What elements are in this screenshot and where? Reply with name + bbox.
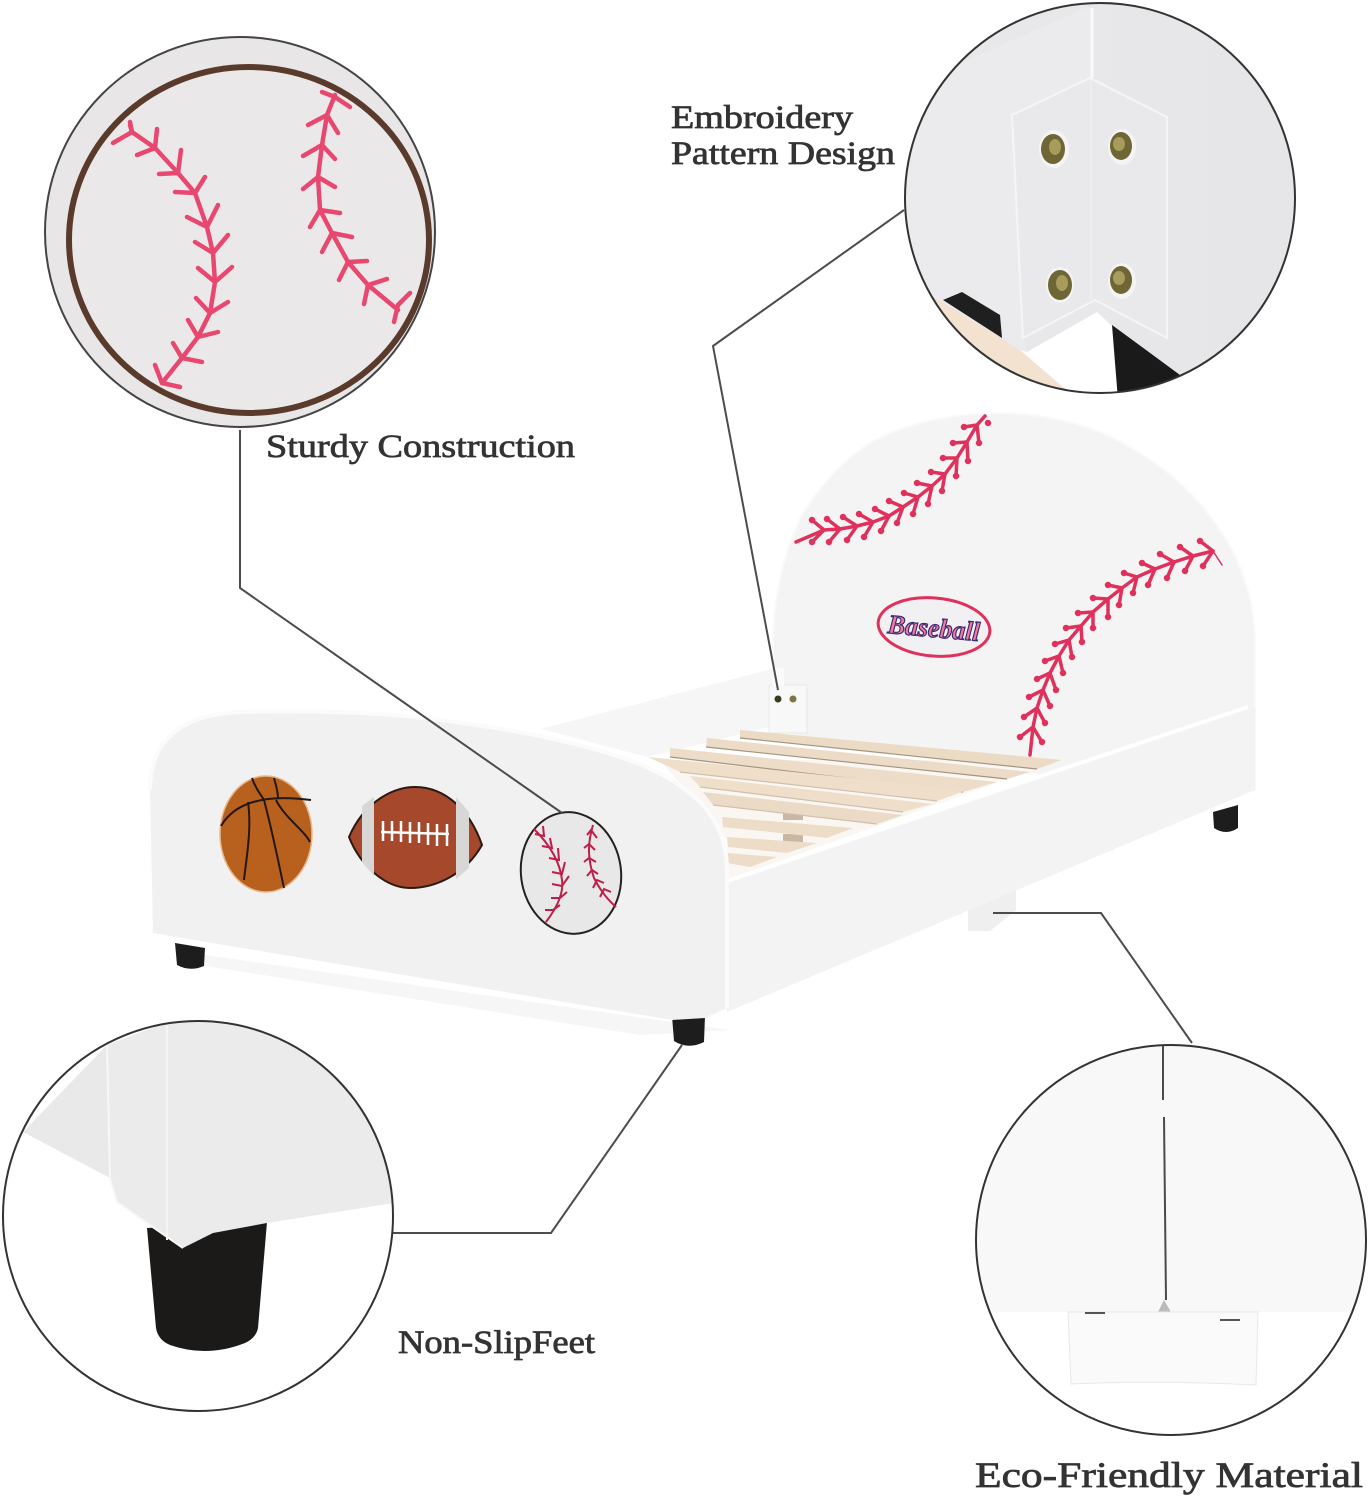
- stitch marks: [1085, 1313, 1240, 1320]
- vertical joint: [1090, 8, 1094, 78]
- detail circle: embroidered baseball: [45, 37, 435, 427]
- callout line: non-slip feet: [393, 1045, 682, 1233]
- baseball logo badge: Baseball: [886, 609, 982, 647]
- center seam: [1163, 1044, 1166, 1300]
- floor shadow under footboard: [200, 955, 730, 1035]
- bolt bottom right: [1108, 263, 1136, 299]
- left foot: [175, 943, 205, 969]
- leather panels: [970, 1040, 1369, 1312]
- side rail: [727, 706, 1255, 1012]
- headboard stitches: upper seam: [796, 416, 988, 542]
- white floor gap: [1020, 312, 1118, 392]
- label: embroidery pattern design: Pattern Design: [671, 136, 895, 172]
- bed illustration: [150, 413, 1255, 1046]
- label: sturdy construction: Sturdy Construction: [266, 429, 575, 465]
- bolt bottom left: [1046, 267, 1074, 303]
- headboard: [773, 413, 1255, 790]
- side panel: [23, 1045, 110, 1178]
- bracket plate: [1012, 78, 1167, 338]
- detail circle: eco-friendly leather seam: [970, 1040, 1369, 1440]
- bed slats: [648, 730, 1062, 880]
- rubber foot: [147, 1222, 267, 1351]
- basketball patch: [220, 776, 312, 892]
- label: non-slip feet: Non-SlipFeet: [398, 1325, 595, 1361]
- right foot: [1213, 805, 1238, 832]
- label: eco-friendly material: Eco-Friendly Material: [975, 1455, 1363, 1495]
- support leg: [1068, 1312, 1258, 1385]
- detail circle: metal corner bracket: [900, 0, 1300, 400]
- center support leg: [968, 890, 1016, 931]
- footboard: [150, 711, 727, 1020]
- left stitched seam: [113, 122, 232, 387]
- brown embroidered ring: [69, 67, 429, 413]
- wood rail: [933, 297, 1065, 389]
- headboard stitches: lower seam: [1020, 541, 1222, 755]
- bolt top right: [1108, 129, 1136, 165]
- baseball logo badge: [876, 593, 992, 661]
- front foot: [672, 1016, 705, 1046]
- detail circle: non-slip foot: [0, 1020, 400, 1420]
- far side rail: [538, 668, 810, 757]
- corner bracket with bolts: [769, 668, 807, 733]
- black leg: [1112, 325, 1180, 392]
- label: embroidery pattern design: [671, 100, 895, 172]
- football patch: [349, 787, 482, 888]
- callout line: embroidery pattern: [713, 210, 904, 690]
- black tread: [943, 292, 1002, 338]
- label: embroidery pattern design: Embroidery: [671, 100, 854, 136]
- left panel: [900, 8, 1092, 352]
- callout line: eco-friendly material: [993, 913, 1192, 1043]
- baseball patch: [513, 806, 629, 940]
- corner panel: [107, 1020, 400, 1248]
- right stitched seam: [303, 92, 410, 322]
- callout line: sturdy construction: [240, 430, 562, 813]
- bolt top left: [1039, 130, 1069, 168]
